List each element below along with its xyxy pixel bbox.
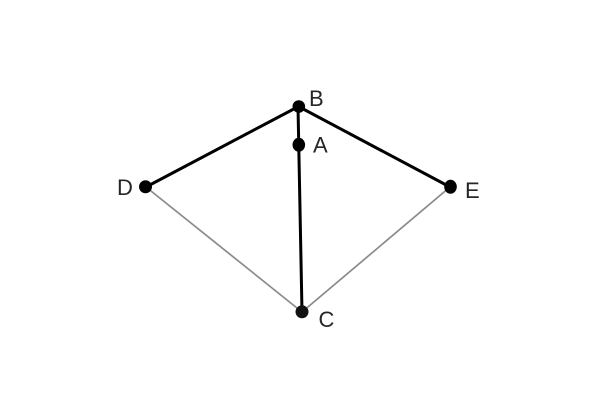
label B: B <box>309 86 324 111</box>
thin line: E to C <box>302 187 450 312</box>
thin line: D to C <box>146 187 302 312</box>
thick line: B to D <box>146 106 298 187</box>
point B <box>292 100 305 113</box>
thick line: B to E <box>298 106 450 187</box>
label A: A <box>313 132 328 158</box>
point C <box>296 305 308 318</box>
point D <box>139 180 152 193</box>
label D: D <box>117 175 133 200</box>
point E <box>444 180 457 194</box>
thick line: B to C <box>298 106 302 312</box>
label C: C <box>318 307 334 332</box>
point A <box>292 138 305 152</box>
label E: E <box>465 178 480 203</box>
